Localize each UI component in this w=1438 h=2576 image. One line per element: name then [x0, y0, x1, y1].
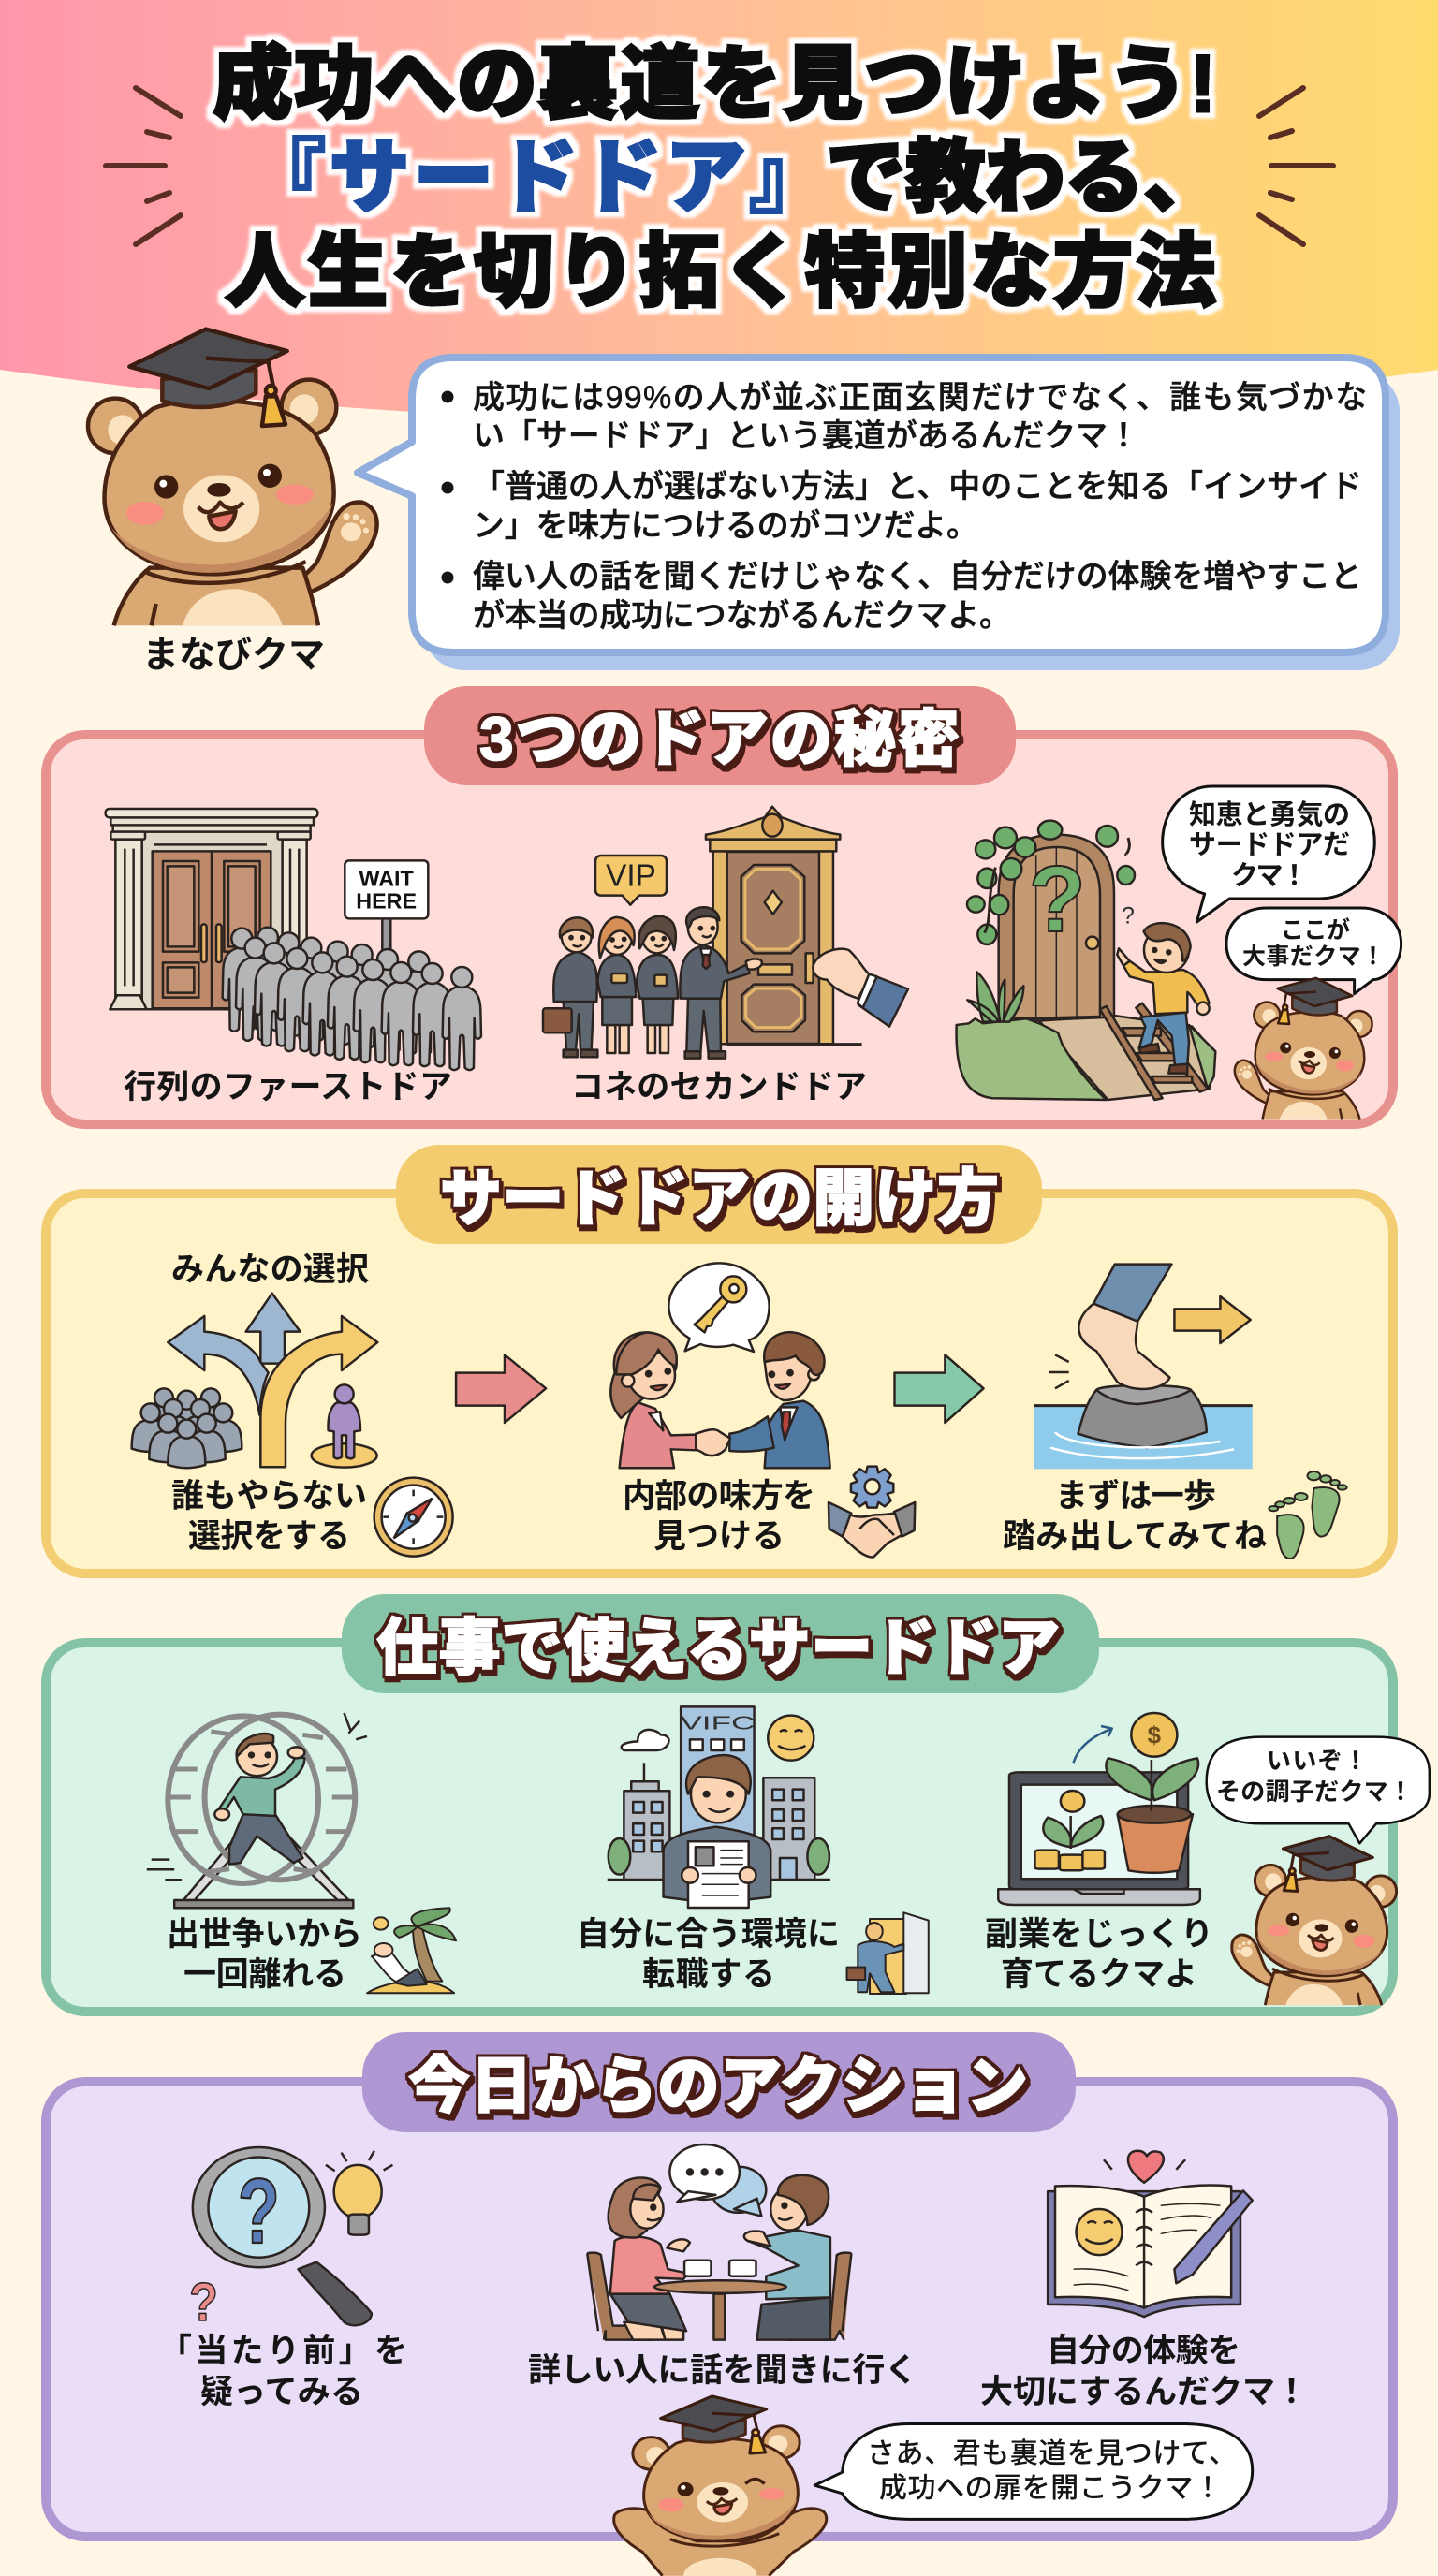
label: take a first step: まずは一歩	[1055, 1478, 1216, 1515]
panel: third door at work	[46, 1594, 1430, 2012]
illustration: hamster wheel runner	[147, 1713, 367, 1908]
emphasis marks left	[106, 88, 181, 244]
label: doubt the obvious: 「当たり前」を	[159, 2333, 407, 2369]
panel heading pill	[362, 2032, 1076, 2132]
label: step away from rat race: 一回離れる	[183, 1956, 346, 1993]
label: doubt the obvious: 疑ってみる	[200, 2374, 363, 2410]
bullet text: 偉い人の話を聞くだけじゃなく、自分だけの体験を増やすこと	[473, 559, 1362, 594]
bubble text: this is important: 大事だクマ！	[1242, 944, 1385, 970]
label: choose what nobody does	[171, 1478, 367, 1555]
illustration: first door queue: WAIT	[359, 866, 414, 890]
panel heading: サードドアの開け方	[440, 1164, 999, 1233]
title: 人生を切り拓く特別な方法	[225, 227, 1216, 317]
label: doubt the obvious	[159, 2333, 407, 2410]
illustration: second door connections	[543, 807, 908, 1059]
bullet markers	[442, 391, 453, 584]
label: value your experience: 大切にするんだクマ！	[980, 2374, 1308, 2410]
illustration: first door queue	[106, 809, 481, 1070]
ivy leaves	[967, 821, 1135, 944]
panel: how to open	[46, 1145, 1393, 1573]
label: first door: 行列のファーストドア	[124, 1069, 452, 1105]
bubble text: wisdom and courage: クマ！	[1231, 861, 1308, 891]
label: take a first step: 踏み出してみてね	[1003, 1518, 1267, 1555]
icon: gear and handshake	[829, 1467, 915, 1557]
panel: three doors	[46, 686, 1401, 1124]
closing speech bubble	[814, 2423, 1253, 2519]
illustration: magnifier and question: ?	[189, 2273, 218, 2333]
arrow: step 2 to 3	[895, 1354, 984, 1423]
illustration: journal and pen	[1048, 2151, 1253, 2317]
panel heading pill	[396, 1145, 1042, 1244]
panel frame	[46, 1643, 1393, 2012]
label: value your experience	[980, 2333, 1308, 2410]
label: step away from rat race: 出世争いから	[167, 1916, 362, 1953]
panel heading: 3つのドアの秘密	[479, 704, 960, 773]
illustration: third door hidden path: ?	[1029, 847, 1086, 952]
bubble: important	[1226, 908, 1401, 994]
panel frame	[46, 1193, 1393, 1573]
hand on handle	[806, 953, 814, 983]
closing bubble text: 成功への扉を開こうクマ！	[879, 2473, 1222, 2504]
bullet text: 成功には99%の人が並ぶ正面玄関だけでなく、誰も気づかな	[473, 380, 1367, 416]
arrow: step 1 to 2	[456, 1354, 546, 1423]
title: 成功への裏道を見つけよう!	[213, 39, 1216, 129]
label: change jobs: 転職する	[642, 1956, 775, 1993]
label: step away from rat race	[167, 1916, 362, 1993]
mascot: manabi bear	[88, 329, 377, 625]
bubble text: this is important	[1242, 916, 1385, 970]
ladder	[1100, 1006, 1163, 1100]
mascot name: まなびクマ	[142, 636, 325, 676]
bubble text: nice: その調子だクマ！	[1216, 1778, 1413, 1806]
mascot: small bear panel 1	[1235, 978, 1372, 1120]
closing bubble text: さあ、君も裏道を見つけて、	[867, 2438, 1237, 2469]
label: find an insider	[623, 1478, 815, 1555]
bubble text: wisdom and courage: 知恵と勇気の	[1189, 799, 1350, 830]
label: side business	[985, 1916, 1213, 1993]
panel: today's actions	[46, 2032, 1393, 2537]
bubble text: wisdom and courage: サードドアだ	[1189, 830, 1350, 860]
label: ask knowledgeable people: 詳しい人に話を聞きに行く	[528, 2352, 917, 2389]
illustration: handshake with insider	[610, 1263, 830, 1468]
panel frame	[46, 735, 1393, 1124]
title	[213, 39, 1224, 317]
illustration: side business laptop	[998, 1713, 1430, 1905]
label: value your experience: 自分の体験を	[1047, 2333, 1240, 2369]
icon: compass	[374, 1478, 453, 1557]
label: choose what nobody does: 誰もやらない	[171, 1478, 367, 1515]
illustration: second door connections: VIP	[606, 859, 656, 894]
bubble: wisdom	[1163, 786, 1374, 922]
mascot: cheering bear	[614, 2396, 827, 2576]
illustration: forked arrows	[132, 1294, 377, 1468]
four people	[564, 1002, 594, 1050]
icon: footprints	[1269, 1471, 1347, 1559]
header gradient band	[0, 0, 1438, 421]
illustration: third door hidden path	[957, 786, 1401, 1100]
bullet text: い「サードドア」という裏道があるんだクマ！	[473, 418, 1139, 454]
bullet text: が本当の成功につながるんだクマよ。	[473, 598, 1011, 634]
boy	[1139, 1013, 1189, 1065]
bubble shadow	[423, 371, 1400, 670]
bear arms and body	[614, 2509, 827, 2576]
label: take a first step	[1003, 1478, 1267, 1555]
illustration: first step on stone	[1034, 1265, 1253, 1469]
illustration: magnifier and question	[189, 2147, 392, 2333]
title: 『サードドア』	[245, 133, 829, 223]
illustration: magnifier and question: ?	[238, 2161, 280, 2262]
label: choose what nobody does: 選択をする	[188, 1518, 350, 1555]
title: で教わる、	[826, 133, 1224, 223]
panel heading pill	[342, 1594, 1099, 1693]
mascot: bear panel 3	[1232, 1837, 1397, 2005]
label: find an insider: 内部の味方を	[623, 1478, 815, 1515]
bear head	[633, 2396, 800, 2546]
label: side business: 副業をじっくり	[985, 1916, 1213, 1953]
illustration: cafe conversation	[587, 2144, 851, 2340]
label: side business: 育てるクマよ	[1001, 1956, 1197, 1993]
closing bubble text	[867, 2438, 1237, 2504]
panel heading: 仕事で使えるサードドア	[376, 1613, 1060, 1682]
bubble text: this is important: ここが	[1281, 916, 1350, 944]
illustration: first door queue: HERE	[356, 889, 417, 914]
illustration: better workplace	[608, 1706, 830, 1908]
label: everyone's choice: みんなの選択	[171, 1251, 369, 1288]
label: find an insider: 見つける	[653, 1518, 785, 1555]
panel frame	[46, 2082, 1393, 2537]
icon: person through door	[847, 1912, 929, 1994]
intro speech bubble	[358, 358, 1400, 670]
bubble text: nice	[1216, 1747, 1413, 1806]
emphasis marks right	[1259, 88, 1333, 244]
bullet text	[473, 380, 1367, 634]
icon: palm island rest	[367, 1908, 456, 1993]
illustration: third door hidden path: ?	[1122, 903, 1135, 929]
label: change jobs: 自分に合う環境に	[577, 1916, 840, 1953]
bubble text: wisdom and courage	[1189, 799, 1350, 891]
label: change jobs	[577, 1916, 840, 1993]
bullet text: 「普通の人が選ばない方法」と、中のことを知る「インサイド	[473, 469, 1362, 505]
illustration: side business laptop: $	[1148, 1723, 1161, 1749]
bubble body	[358, 358, 1386, 652]
bullet text: ン」を味方につけるのがコツだよ。	[473, 508, 978, 544]
label: second door: コネのセカンドドア	[571, 1069, 867, 1105]
bubble text: nice: いいぞ！	[1267, 1747, 1368, 1775]
illustration: better workplace: VIFC	[680, 1713, 756, 1734]
bubble: nice	[1207, 1737, 1430, 1843]
panel heading: 今日からのアクション	[408, 2051, 1028, 2120]
panel heading pill	[424, 686, 1016, 785]
